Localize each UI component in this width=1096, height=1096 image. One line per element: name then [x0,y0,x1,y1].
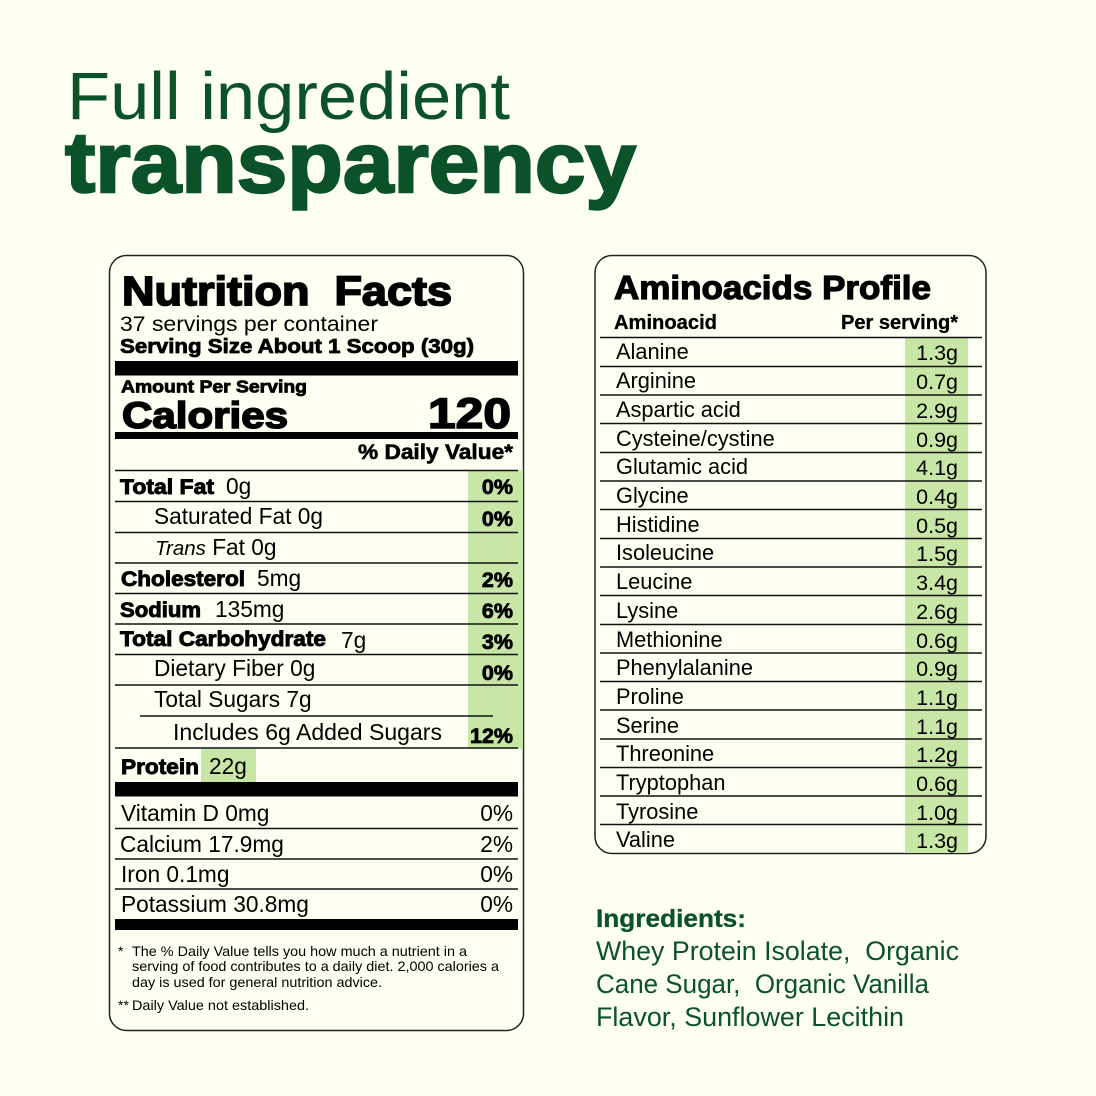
vitamins and minerals: Iron 0.1mg [121,861,229,887]
aminoacid rows: 2.9g [916,399,958,423]
highlight: daily value column [468,470,523,749]
aminoacid rows: 0.6g [916,629,958,653]
nutrient rows: 7g [341,627,366,653]
aminoacid rows: Tyrosine [616,799,698,824]
heading: aminoacids profile: Aminoacids Profile [614,269,931,306]
aminoacid rows: Lysine [616,598,678,623]
aminoacid rows: 0.5g [916,514,958,538]
vitamins and minerals [120,800,513,917]
vitamins and minerals: 0% [480,891,513,917]
aminoacid rows: 0.4g [916,485,958,509]
footnotes: * [118,943,124,959]
panel: aminoacids profile [595,256,986,854]
panel outline [110,256,524,1030]
nutrient rows: Total Fat [120,476,214,499]
aminoacid rows: 1.3g [916,341,958,365]
aminoacid rows: 0.6g [916,772,958,796]
highlight: per serving column [905,338,968,853]
highlight: protein amount [201,749,256,782]
ingredients: Flavor, Sunflower Lecithin [596,1002,904,1032]
nutrient rows: Cholesterol [121,568,245,591]
nutrient rows: Saturated Fat 0g [154,503,323,529]
aminoacid rows [616,339,958,853]
ingredients: Ingredients: [596,905,746,933]
aminoacid rows: 1.1g [916,715,958,739]
nutrient rows: Includes 6g Added Sugars [173,719,442,745]
nutrient rows: 22g [209,753,247,779]
nutrient rows: 0% [482,475,513,499]
aminoacid rows: 0.9g [916,657,958,681]
calories: 120 [428,390,511,438]
nutrient rows: Dietary Fiber 0g [154,655,315,681]
aminoacid rows: Phenylalanine [616,655,753,680]
aminoacid rows: Glycine [616,483,689,508]
aminoacid rows: Glutamic acid [616,454,748,479]
nutrient rows: 5mg [257,565,301,591]
vitamins and minerals: Vitamin D 0mg [121,800,269,826]
aminoacid rows: 1.5g [916,542,958,566]
nutrient rows: 0g [226,473,251,499]
vitamins and minerals: 2% [480,831,513,857]
aminoacid rows: Tryptophan [616,770,725,795]
aminoacid rows: Methionine [616,627,723,652]
nutrient rows: Protein [121,756,199,779]
aminoacid rows: Alanine [616,339,689,364]
aminoacid rows: 1.0g [916,801,958,825]
ingredients: Whey Protein Isolate, Organic [596,936,959,966]
aminoacid rows: Aspartic acid [616,397,741,422]
nutrient rows: 6% [482,599,513,623]
aminoacid rows: Leucine [616,569,692,594]
footnotes [118,943,499,1013]
nutrient rows: Sodium [120,599,201,622]
aminoacid rows: 4.1g [916,456,958,480]
aminoacid rows: 3.4g [916,571,958,595]
title: transparency [65,116,636,211]
aminoacid rows: 2.6g [916,600,958,624]
footnotes: day is used for general nutrition advice. [132,974,382,990]
vitamins and minerals: Potassium 30.8mg [121,891,309,917]
aminoacid rows: Valine [616,827,675,852]
aminoacid rows: Threonine [616,741,714,766]
footnotes: ** [118,997,129,1013]
heading: nutrition facts: Nutrition Facts [122,268,452,314]
ingredients: Cane Sugar, Organic Vanilla [596,969,930,999]
calories: Calories [122,395,288,436]
ingredients [596,905,959,1032]
aminoacid rows: Cysteine/cystine [616,426,775,451]
footnotes: Daily Value not established. [132,997,309,1013]
servings per container: 37 servings per container [120,312,378,336]
amount per serving: Amount Per Serving [121,376,307,396]
aminoacid rows: 0.7g [916,370,958,394]
nutrient rows: Trans Fat 0g [155,534,277,560]
aminoacid rows: Serine [616,713,679,738]
nutrient rows: Total Carbohydrate [120,628,326,651]
daily value header: % Daily Value* [358,441,514,464]
aminoacid rows: Histidine [616,512,700,537]
nutrient rows [120,473,513,779]
calories [122,390,511,438]
aminoacid rows: Proline [616,684,684,709]
nutrient rows: 135mg [215,596,284,622]
nutrient rows: Total Sugars 7g [154,686,312,712]
footnotes: The % Daily Value tells you how much a nutrient in a [132,943,467,959]
aminoacid rows: 0.9g [916,428,958,452]
panel: nutrition facts [110,256,524,1030]
table header: Aminoacid [614,312,717,334]
aminoacid rows: 1.1g [916,686,958,710]
nutrient rows: 2% [482,568,513,592]
aminoacid rows: 1.3g [916,829,958,853]
nutrient rows: 3% [482,630,513,654]
vitamins and minerals: Calcium 17.9mg [120,831,284,857]
title: Full ingredient [67,59,510,134]
panel outline [595,256,986,854]
table header [614,312,958,334]
vitamins and minerals: 0% [480,800,513,826]
aminoacid rows: Isoleucine [616,540,714,565]
title [65,59,636,211]
serving size: Serving Size About 1 Scoop (30g) [120,335,474,358]
nutrient rows: 12% [470,724,513,748]
vitamins and minerals: 0% [480,861,513,887]
aminoacid rows: 1.2g [916,743,958,767]
nutrient rows: 0% [482,507,513,531]
aminoacid rows: Arginine [616,368,696,393]
footnotes: serving of food contributes to a daily diet. 2,000 calories a [132,958,499,974]
nutrient rows: 0% [482,661,513,685]
table header: Per serving* [841,312,958,334]
